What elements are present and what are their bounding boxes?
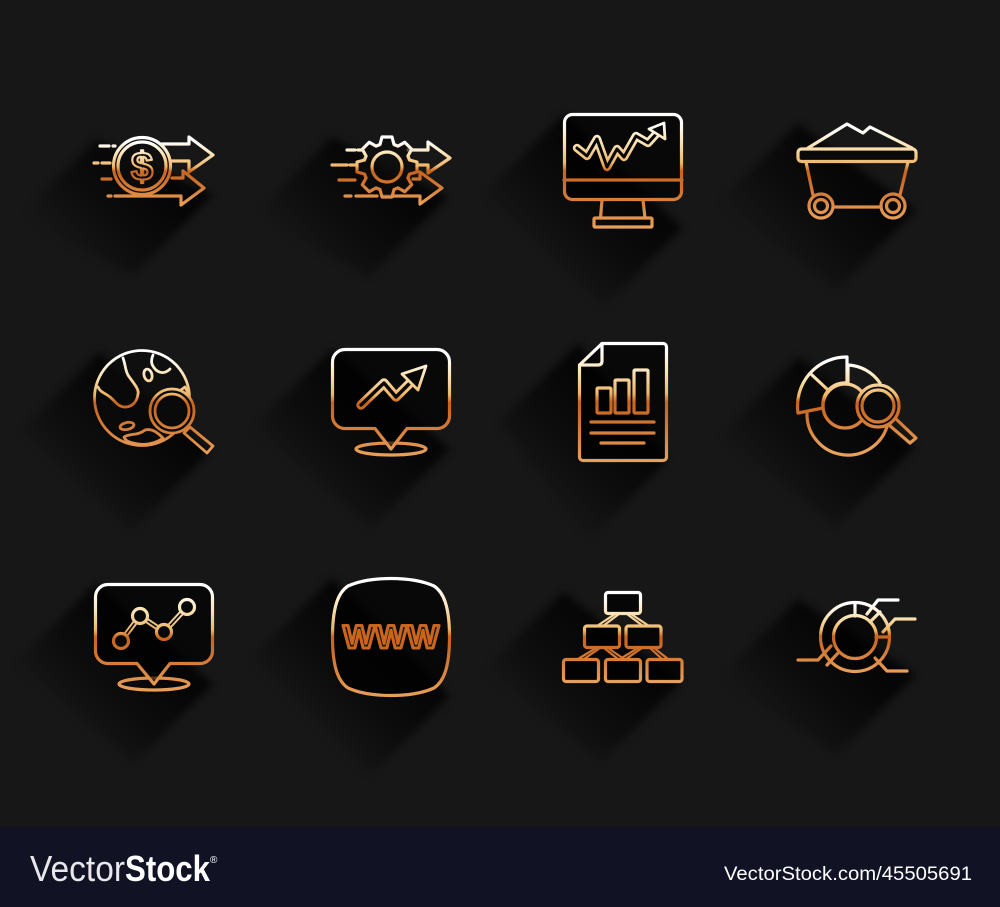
- icon: globe with magnifier: [94, 350, 213, 453]
- icon: hierarchy diagram: [564, 592, 682, 682]
- footer logo: [30, 848, 218, 889]
- footer band: [0, 827, 1000, 907]
- icon: map pin bubble with line graph: [96, 584, 212, 690]
- footer logo: Vector: [30, 848, 125, 889]
- icon: dollar coin with speed arrows: [94, 137, 213, 205]
- footer logo: ®: [210, 855, 218, 866]
- footer logo: Stock: [125, 848, 211, 889]
- icon: document with bar chart: [580, 344, 666, 460]
- icon: donut chart with callout lines: [798, 600, 915, 672]
- icon: map pin bubble with trend arrow: [332, 350, 450, 455]
- icon: mine cart: [798, 124, 916, 218]
- icon: dollar coin with speed arrows: $: [131, 145, 153, 189]
- icon: monitor with rising chart: [564, 114, 682, 227]
- icon: gear with speed arrows: [332, 137, 450, 204]
- icon: pie chart with magnifier: [797, 357, 916, 455]
- long shadows behind icons: [15, 114, 916, 776]
- icon: www rounded badge: WWW: [343, 619, 440, 655]
- icon: www rounded badge: [332, 578, 450, 696]
- footer image id: VectorStock.com/45505691: [724, 864, 972, 885]
